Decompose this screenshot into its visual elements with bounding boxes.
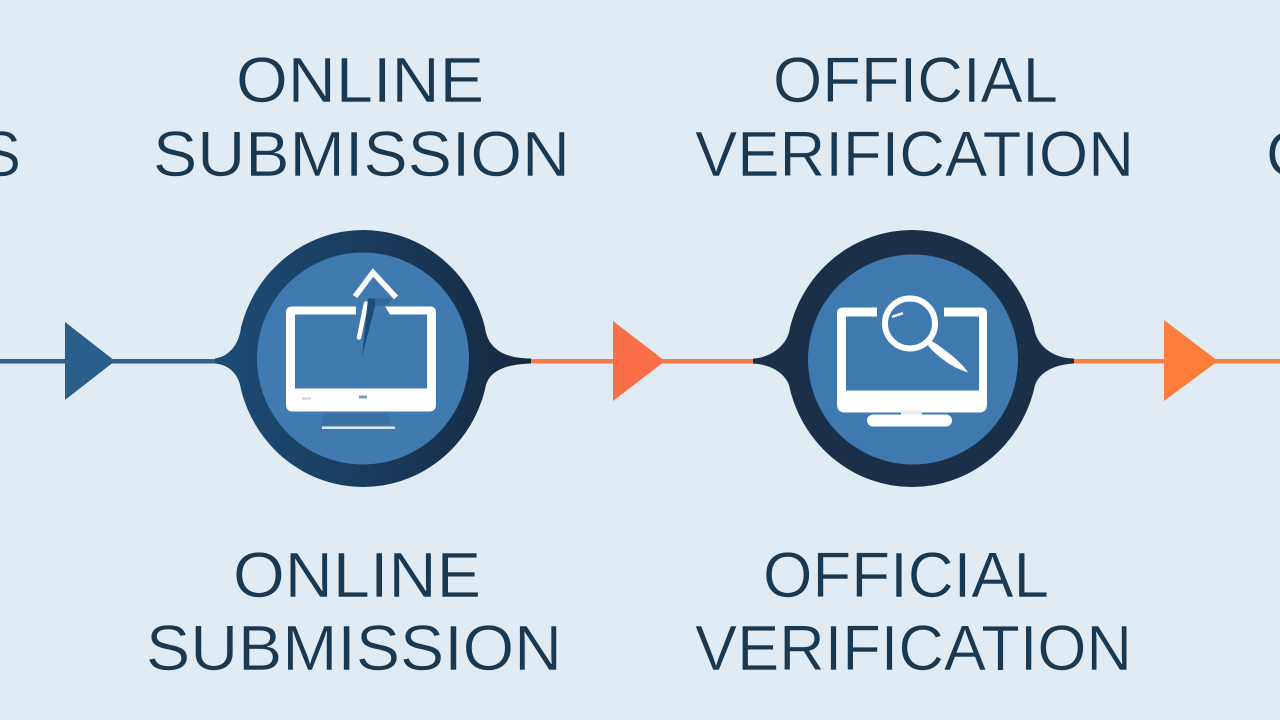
node: official verification xyxy=(753,230,1074,487)
heading: online submission top: ONLINE xyxy=(236,44,484,116)
icon: monitor with upload arrow xyxy=(286,272,436,429)
heading: official verification bottom: OFFICIAL xyxy=(763,539,1049,611)
heading: online submission bottom xyxy=(146,539,562,684)
heading: official verification top xyxy=(695,44,1134,190)
arrow: blue xyxy=(65,322,115,400)
node ring xyxy=(753,230,1074,487)
heading: official verification bottom: VERIFICATION xyxy=(695,612,1132,684)
heading: official verification top: VERIFICATION xyxy=(695,118,1134,190)
connector line: orange middle xyxy=(528,359,758,364)
arrow: orange middle xyxy=(613,321,665,401)
node inner disc xyxy=(257,252,469,464)
arrow: orange right xyxy=(1164,320,1218,401)
heading: online submission top: SUBMISSION xyxy=(153,118,570,190)
heading: online submission bottom: SUBMISSION xyxy=(146,612,562,684)
connector line: orange right xyxy=(1070,359,1280,364)
node: online submission xyxy=(215,230,531,487)
icon: monitor with magnifying glass xyxy=(837,298,987,426)
heading: official verification bottom xyxy=(695,539,1132,684)
heading: online submission top xyxy=(153,44,570,190)
heading: official verification top: OFFICIAL xyxy=(773,44,1058,116)
node inner disc xyxy=(808,254,1018,464)
connector line: blue xyxy=(0,359,222,364)
node ring xyxy=(215,230,531,487)
heading: online submission bottom: ONLINE xyxy=(233,539,481,611)
